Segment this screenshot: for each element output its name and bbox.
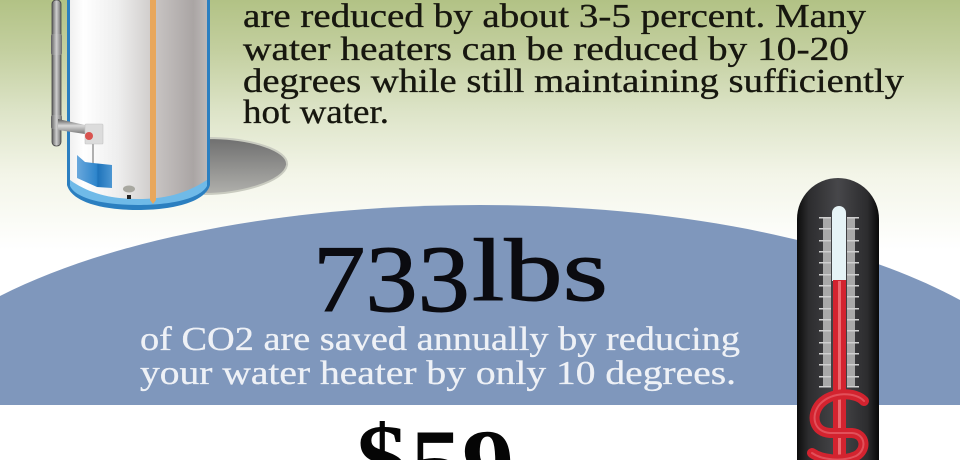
tank base light band [70,180,207,205]
tank shadow [205,138,287,194]
body text: degrees while still maintaining sufficiently [243,63,904,100]
big stat: 733lbs: lbs [472,222,608,320]
orange stripe [150,0,156,204]
water heater illustration [51,0,287,210]
red column [833,280,846,460]
tank body [70,0,207,199]
thermometer body [797,178,879,460]
vertical pipe [52,0,61,146]
blue burner cover [77,155,112,188]
body text: hot water. [243,94,389,131]
thin rod [92,144,94,164]
red dial [85,132,93,140]
drain valve [123,186,135,199]
CO2 description: of CO2 are saved annually by reducing [140,321,740,358]
body text: water heaters can be reduced by 10-20 [243,31,849,68]
pipe fitting lower [51,115,62,129]
body text [243,0,904,131]
CO2 description [140,321,740,392]
background gradient [0,0,960,250]
column highlight [838,281,841,460]
red dollar sign [812,394,864,460]
thermometer [797,178,879,460]
pipe fitting upper [51,34,62,55]
blue arc panel [0,205,960,405]
big stat: 733lbs [313,222,608,332]
scale ticks [819,217,859,388]
horizontal pipe [58,119,85,134]
big stat: 733lbs: 733 [313,226,470,332]
glass tube [832,206,846,281]
thermostat box [85,124,103,144]
big stat: $59 [356,405,514,460]
CO2 description: your water heater by only 10 degrees. [140,355,736,392]
tank rim [67,0,210,210]
